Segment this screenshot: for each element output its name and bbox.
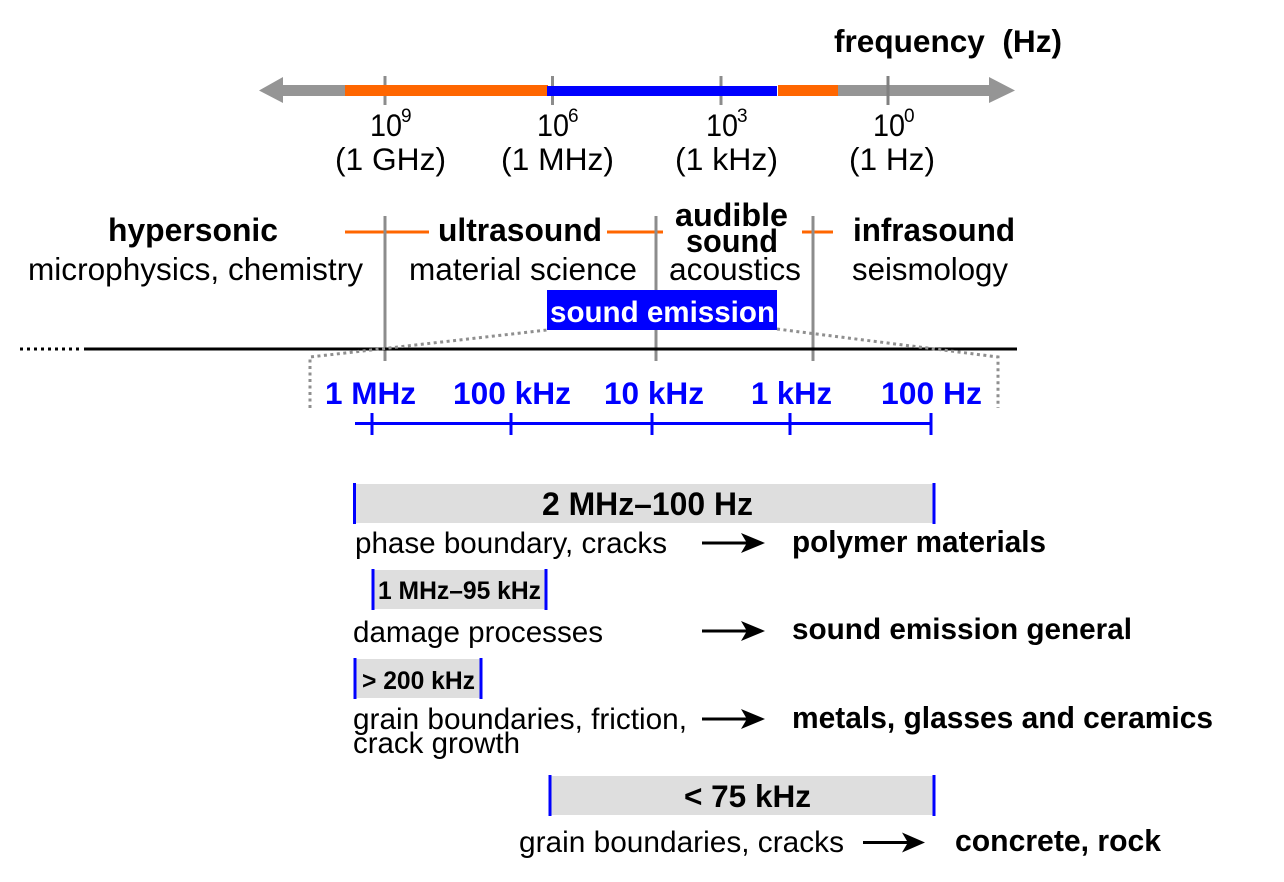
tick label 10^3: (1 kHz) xyxy=(675,141,778,177)
range bar: below 75 kHz: < 75 kHz xyxy=(684,778,811,814)
range bar: above 200 kHz: > 200 kHz xyxy=(362,668,475,695)
row: damage processes to sound emission general: sound emission general xyxy=(792,613,1132,646)
infrasound label: infrasound xyxy=(853,212,1015,248)
row: damage processes to sound emission general xyxy=(353,613,1132,649)
gray right arrow xyxy=(838,77,1015,103)
row: grain boundaries to metals, glasses and ceramics: metals, glasses and ceramics xyxy=(792,700,1213,735)
tick label 10^9 xyxy=(335,106,446,177)
arrow xyxy=(702,621,765,641)
row: grain boundaries to metals, glasses and ceramics xyxy=(353,700,1213,760)
tick label 10^3: 3 xyxy=(737,106,748,127)
ultrasound label: material science xyxy=(409,251,637,287)
tick label 10^3 xyxy=(675,106,778,177)
range bar: 2 MHz to 100 Hz xyxy=(354,483,934,524)
orange band: ultrasound side xyxy=(345,85,548,96)
row: phase boundary to polymer materials xyxy=(355,524,1046,560)
tick label 10^6 xyxy=(501,106,614,177)
audible sound label: audible xyxy=(675,197,788,233)
row: grain boundaries to metals, glasses and ceramics: crack growth xyxy=(353,727,520,760)
audible sound label xyxy=(669,197,801,287)
range bar: 1 MHz to 95 kHz: 1 MHz–95 kHz xyxy=(378,578,541,605)
audible sound label: acoustics xyxy=(669,251,801,287)
tick label 10^9: (1 GHz) xyxy=(335,141,446,177)
tick label 10^6: 10 xyxy=(537,107,569,143)
range bar: above 200 kHz xyxy=(355,658,482,699)
audible sound label: sound xyxy=(686,223,778,259)
frequency axis heading: frequency (Hz) xyxy=(834,23,1062,59)
tick label 10^0: 10 xyxy=(873,107,905,143)
row: grain boundaries, cracks to concrete, rock: grain boundaries, cracks xyxy=(519,826,844,859)
arrow xyxy=(863,832,925,852)
hypersonic label: hypersonic xyxy=(108,212,278,248)
tick label 10^3: 10 xyxy=(706,107,738,143)
range bar: below 75 kHz xyxy=(550,775,934,816)
black spectrum line xyxy=(20,348,1017,350)
hypersonic label xyxy=(28,212,363,287)
blue frequency scale labels: 10 kHz xyxy=(604,375,704,411)
arrow xyxy=(702,533,765,553)
tick label 10^6: 6 xyxy=(568,106,579,127)
blue band: sound emission xyxy=(547,86,777,96)
range bar: 2 MHz to 100 Hz: 2 MHz–100 Hz xyxy=(542,486,753,522)
infrasound label xyxy=(852,212,1015,287)
range bar: 1 MHz to 95 kHz xyxy=(373,569,546,610)
ultrasound label xyxy=(409,212,637,287)
hypersonic label: microphysics, chemistry xyxy=(28,251,363,287)
row: phase boundary to polymer materials: polymer materials xyxy=(792,524,1046,559)
infrasound label: seismology xyxy=(852,251,1008,287)
row: phase boundary to polymer materials: phase boundary, cracks xyxy=(355,527,667,560)
tick label 10^0 xyxy=(849,106,935,177)
gray left arrow xyxy=(259,77,346,103)
row: grain boundaries, cracks to concrete, rock: concrete, rock xyxy=(955,825,1161,858)
orange range dashes xyxy=(345,230,833,234)
row: grain boundaries to metals, glasses and ceramics: grain boundaries, friction, xyxy=(353,703,687,736)
row: grain boundaries, cracks to concrete, rock xyxy=(519,825,1161,859)
blue frequency scale labels: 100 Hz xyxy=(881,375,982,411)
dotted zoom guides xyxy=(310,329,998,408)
tick label 10^9: 9 xyxy=(401,106,412,127)
blue frequency scale labels xyxy=(325,375,982,411)
ultrasound label: ultrasound xyxy=(438,212,602,248)
sound emission box: sound emission xyxy=(550,296,775,329)
blue frequency scale labels: 1 MHz xyxy=(325,375,416,411)
tick label 10^6: (1 MHz) xyxy=(501,141,614,177)
blue frequency scale xyxy=(355,413,931,435)
orange band: audible side xyxy=(778,85,838,96)
tick over gray xyxy=(886,76,890,105)
arrow xyxy=(702,709,765,729)
blue frequency scale labels: 100 kHz xyxy=(453,375,571,411)
tick label 10^0: (1 Hz) xyxy=(849,141,935,177)
gray range dividers xyxy=(385,216,813,361)
frequency spectrum arrow xyxy=(259,76,1015,105)
tick label 10^9: 10 xyxy=(370,107,402,143)
blue frequency scale labels: 1 kHz xyxy=(751,375,832,411)
axis ticks behind bands xyxy=(385,76,721,105)
tick label 10^0: 0 xyxy=(904,106,915,127)
row: damage processes to sound emission general: damage processes xyxy=(353,616,603,649)
